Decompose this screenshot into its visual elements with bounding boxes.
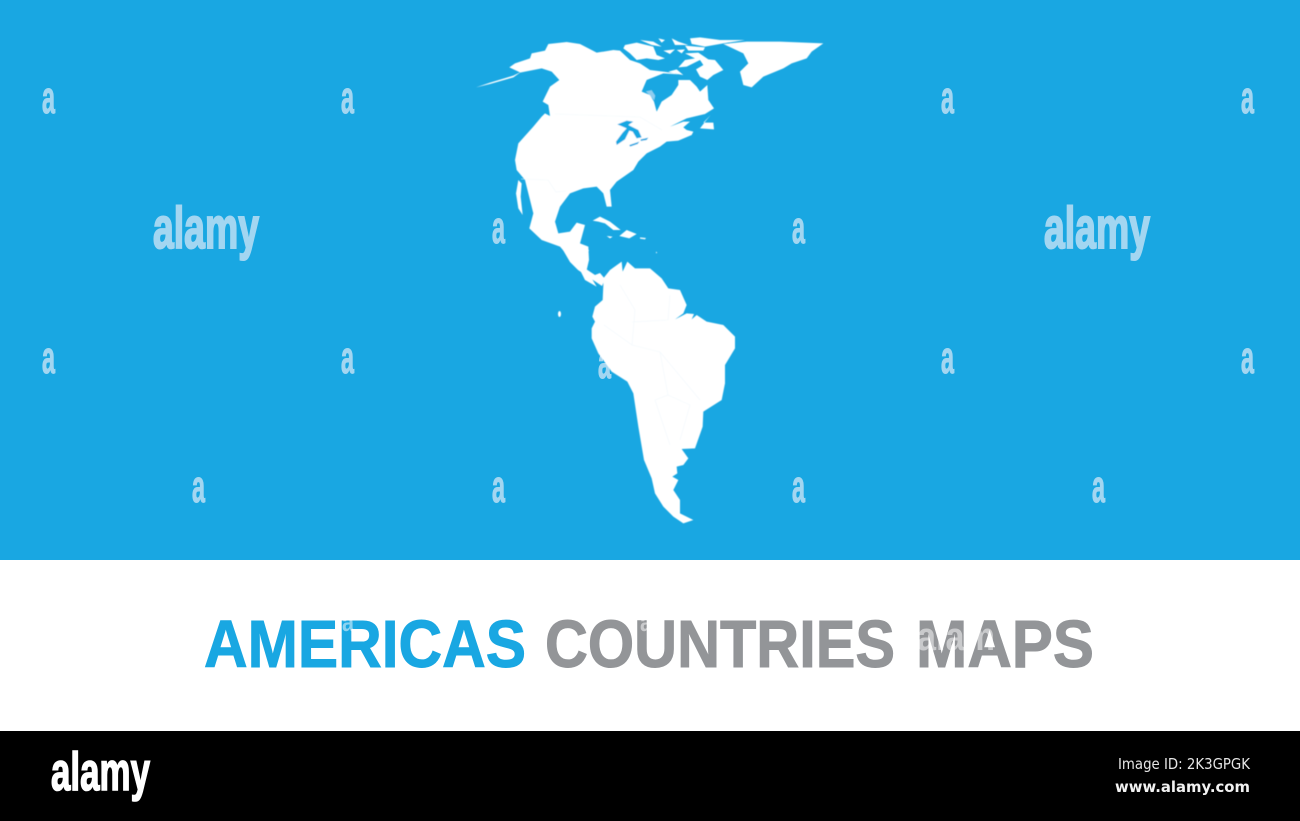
watermark pattern: alamy [153,196,259,261]
Newfoundland [700,115,714,129]
Great Lakes [616,121,648,147]
watermark pattern: a [792,461,806,512]
South America landmass [592,262,735,523]
faint watermark over title: a [640,607,652,637]
watermark pattern: a [598,337,612,388]
watermark pattern: a [42,72,56,123]
watermark pattern: a [792,202,806,253]
watermark pattern: a [941,72,955,123]
watermark pattern: a [42,332,56,383]
watermark pattern: a [1241,332,1255,383]
Greenland [723,42,823,87]
map of the Americas [476,37,823,523]
watermark pattern: a [192,461,206,512]
black footer bar [0,731,1300,821]
footer website: www.alamy.com [1115,778,1250,796]
watermark pattern: a [492,202,506,253]
white title panel [0,560,1300,731]
watermark pattern: a [341,332,355,383]
title word: Countries: COUNTRIES [545,607,895,682]
watermark pattern: a [492,461,506,512]
title [204,607,1094,682]
footer logo: alamy [51,742,150,802]
title word: Americas: AMERICAS [204,607,526,682]
watermark pattern [42,72,1255,512]
title word: Maps: MAPS [916,607,1094,682]
Hudson Bay light patch [646,90,655,100]
Galapagos Islands [558,311,561,317]
faint watermark over title: alam [917,615,995,659]
watermark pattern: a [341,72,355,123]
country borders [521,114,700,445]
watermark pattern: a [941,332,955,383]
blue map panel [0,0,1300,560]
Baja California [516,180,523,215]
Arctic islands and Greenland [623,37,823,87]
Central America isthmus [563,250,605,286]
watermark pattern: a [1241,72,1255,123]
watermark pattern: a [1092,461,1106,512]
Canadian Arctic islands [623,37,745,80]
Cuba and Caribbean islands [593,217,657,253]
footer image id: Image ID: 2K3GPGK [1118,755,1251,773]
faint watermark over title [342,607,995,659]
watermark pattern: alamy [1044,196,1150,261]
North and Central America landmass [476,42,714,287]
faint watermark over title: a [342,607,354,637]
